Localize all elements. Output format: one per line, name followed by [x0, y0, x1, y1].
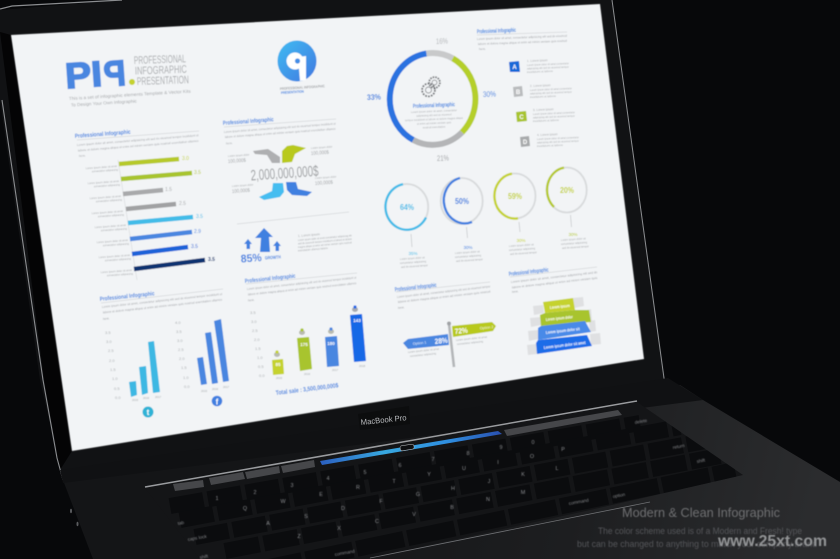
- donut labels: [367, 37, 496, 163]
- heading: Professional Infographic: [100, 291, 155, 303]
- sign: 28%: consectetur adipisicing: [410, 351, 437, 358]
- keyboard legends: delete: [634, 418, 648, 425]
- keyboard legends: 3: [290, 483, 294, 489]
- bar labels: consectetur adipisicing: [98, 212, 125, 218]
- keyboard legends: L: [556, 466, 558, 472]
- bar labels: consectetur adipisicing: [105, 256, 132, 262]
- item text: incididunt ut labore: [537, 143, 564, 148]
- facebook chart: [175, 319, 230, 393]
- axis labels: [250, 310, 265, 378]
- logo: PIP: [64, 52, 135, 96]
- body text: Lorem ipsum dolor sit amet, consectetur adipisicing elit sed do eiusmod: [477, 34, 567, 41]
- twitter chart: 0.5: [114, 386, 120, 391]
- item text: adipisicing elit sed do eiusmod tempor: [527, 65, 569, 70]
- body text: labore et dolore magna aliqua ut enim ad minim veniam quis nostrud: [398, 289, 491, 304]
- twitter chart: 1.0: [112, 376, 118, 381]
- keyboard legends: H: [451, 486, 455, 492]
- body text: Lorem ipsum dolor sit amet, consectetur adipisicing elit sed do eiusmod tempor incididunt ut: [77, 133, 199, 147]
- keyboard legends: D: [341, 506, 345, 512]
- body text: Lorem ipsum dolor sit amet, consectetur adipisicing elit sed do: [511, 270, 598, 284]
- donut labels: 33%: [367, 93, 381, 102]
- value labels: 100,000$: [228, 158, 246, 165]
- logo wordmark: INFOGRAPHIC: [135, 64, 187, 77]
- step layers: [536, 298, 592, 354]
- bar values: [165, 156, 215, 263]
- sign: 72%: Lorem ipsum dolor sit amet: [456, 335, 487, 342]
- keyboard legends: [177, 418, 706, 559]
- panel: stacked steps: [509, 267, 601, 355]
- gauge: 59%: [494, 174, 537, 256]
- gauge: 59%: 30%: [516, 238, 526, 243]
- logo wordmark: [134, 53, 189, 88]
- gauge: 64%: sed do eiusmod tempor: [401, 263, 428, 269]
- keyboard legends: P: [561, 447, 565, 453]
- growth text: magna aliqua ut enim ad minim veniam quis nostrud: [298, 240, 352, 249]
- caption body: The color scheme used is of a Modern and Fresh! type: [598, 526, 802, 537]
- bar values: 3.5: [191, 244, 198, 250]
- year labels: [276, 364, 366, 380]
- value labels: 100,000$: [311, 150, 329, 157]
- facebook chart: 1.0: [183, 375, 189, 380]
- body text: here.: [248, 298, 255, 302]
- center logo caption: [280, 84, 325, 95]
- sign: 72%: 72%: [454, 326, 468, 336]
- body text: [77, 133, 199, 158]
- donut center text: Lorem ipsum dolor sit amet, consectetur: [411, 108, 457, 114]
- bar labels: Lorem ipsum dolor sit amet: [95, 223, 126, 229]
- keyboard legends: W: [280, 499, 286, 505]
- bar values: 3.5: [196, 214, 203, 220]
- body text: labore et dolore magna aliqua ut enim ad minim veniam quis nostrud exercitation ullamco: [103, 298, 223, 314]
- bar labels: Lorem ipsum dolor sit amet: [101, 268, 132, 274]
- growth text: exercitation ullamco laboris: [298, 246, 329, 252]
- donut center text: tempor incididunt ut labore et dolore magna aliqua: [405, 116, 463, 122]
- growth text: 1. Lorem ipsum: [298, 232, 320, 238]
- item text: Lorem ipsum dolor sit amet consectetur: [537, 135, 579, 141]
- gauge: 64%: 35%: [408, 251, 418, 256]
- heading: Professional Infographic: [395, 283, 437, 293]
- growth callout: GROWTH: [265, 254, 282, 260]
- item text: incididunt ut labore: [530, 94, 557, 99]
- body text: [224, 122, 336, 145]
- facebook chart: 0.0: [184, 384, 190, 389]
- bar labels: consectetur adipisicing: [92, 167, 119, 173]
- growth callout: [240, 228, 352, 265]
- donut center text: [405, 108, 463, 129]
- trackpad edge: [370, 502, 650, 558]
- axis labels: 0.0: [259, 373, 265, 378]
- caption body: but can be changed to anything to match your company brand: [577, 539, 817, 550]
- bar icons: [274, 305, 358, 357]
- axis labels: 3.0: [251, 319, 257, 324]
- twitter chart: 2017: [155, 395, 162, 399]
- caption body: [577, 526, 817, 550]
- arrow shapes: [253, 145, 312, 200]
- body text: [102, 292, 223, 321]
- item text: 3. Lorem ipsum: [533, 107, 554, 112]
- growth text: sed do eiusmod tempor incididunt ut labore et dolore: [298, 237, 352, 245]
- keyboard legends: caps lock: [187, 534, 208, 542]
- bars: [272, 314, 366, 375]
- item text: Lorem ipsum dolor sit amet consectetur: [527, 61, 569, 67]
- bar values: 3.0: [182, 156, 189, 162]
- keyboard legends: return: [672, 443, 685, 450]
- body text: Lorem ipsum dolor sit amet, consectetur adipisicing elit sed do eiusmod tempor: [397, 284, 491, 299]
- bar values: 1.5: [165, 187, 172, 193]
- keyboard legends: V: [412, 512, 416, 518]
- panel: 2,000,000,000$ arrows: Lorem ipsum dolor: [311, 144, 333, 150]
- caption heading: Modern & Clean Infographic: [622, 505, 780, 520]
- bar values: 143: [353, 318, 361, 323]
- step labels: Lorem ipsum: [550, 303, 570, 310]
- panel: horizontal bars: [75, 130, 215, 280]
- gauge: 50%: consectetur adipisicing: [455, 253, 482, 259]
- keyboard legends: 1: [216, 496, 218, 502]
- axis labels: 2.5: [252, 328, 258, 333]
- bar labels: consectetur adipisicing: [94, 182, 121, 188]
- twitter chart: 3.0: [106, 339, 112, 344]
- hinge shadow band: [60, 378, 703, 483]
- heading: Professional Infographic: [223, 117, 274, 127]
- laptop base: [63, 385, 840, 559]
- twitter chart: 1.5: [110, 367, 116, 372]
- keyboard legends: U: [462, 466, 466, 472]
- keyboard legends: J: [488, 479, 491, 485]
- tagline: To Design Your Own Infographic: [71, 98, 138, 107]
- donut ring: [390, 53, 475, 145]
- item text: incididunt ut labore: [527, 69, 554, 74]
- growth text: [298, 232, 352, 252]
- keyboard well: [145, 402, 743, 559]
- icon: gears: [422, 77, 440, 96]
- bar values: 3.5: [194, 170, 201, 176]
- keyboard legends: option: [612, 492, 626, 499]
- donut labels: 21%: [437, 154, 449, 163]
- gauge: 20%: 20%: [560, 186, 574, 195]
- keyboard legends: tab: [177, 520, 185, 526]
- twitter chart: 2.0: [109, 358, 115, 363]
- sign: 72%: [452, 322, 496, 346]
- center logo badge: [278, 40, 316, 82]
- facebook chart: 2.0: [179, 356, 185, 361]
- bar values: [275, 318, 361, 367]
- side tabs: [527, 297, 601, 355]
- item badges: [509, 61, 530, 147]
- year labels: 2017: [332, 368, 339, 372]
- logo: PIP: P: [102, 52, 127, 95]
- item text: adipisicing elit sed do eiusmod tempor: [537, 139, 579, 144]
- center logo caption: PRESENTATION: [281, 90, 304, 95]
- laptop lid: [0, 0, 668, 480]
- step labels: Lorem ipsum dolor sit amet: [544, 340, 586, 350]
- keyboard legends: 9: [500, 445, 502, 451]
- badge letters: [512, 65, 528, 146]
- donut center text: adipisicing elit sed do eiusmod: [416, 112, 452, 118]
- sign: 28%: 28%: [434, 336, 448, 346]
- body text: Lorem ipsum dolor sit amet, consectetur adipisicing elit sed do eiusmod tempor incididunt ut: [247, 276, 357, 291]
- gauge: 64%: [385, 184, 428, 269]
- logo wordmark: PRESENTATION: [137, 74, 189, 88]
- heading: Professional Infographic: [509, 267, 549, 278]
- keyboard legends: command: [334, 548, 355, 557]
- year labels: 2015: [276, 376, 283, 380]
- panel: sales chart: [245, 273, 366, 397]
- gauge: 50%: [441, 178, 483, 263]
- badge letters: A: [512, 65, 517, 71]
- gauge: 59%: consectetur adipisicing: [509, 246, 536, 252]
- body text: labore et dolore magna aliqua ut enim ad minim veniam quis: [512, 276, 598, 289]
- bar labels: [86, 164, 134, 277]
- gauge: 20%: consectetur adipisicing: [561, 240, 588, 246]
- twitter chart: 0.0: [115, 395, 121, 400]
- keyboard legends: 8: [466, 451, 470, 457]
- bar labels: Lorem ipsum dolor sit amet: [97, 238, 128, 244]
- heading: Professional Infographic: [245, 274, 296, 285]
- bar labels: consectetur adipisicing: [96, 197, 123, 203]
- item text: adipisicing elit sed do eiusmod tempor: [530, 90, 572, 95]
- body text: here.: [103, 316, 110, 321]
- body text: labore et dolore magna aliqua ut enim ad minim veniam quis nostrud exercitation ullamco: [225, 127, 336, 139]
- body text: here.: [79, 153, 86, 158]
- axis labels: 1.0: [257, 355, 263, 360]
- center logo caption: PROFESSIONAL INFOGRAPHIC: [280, 84, 325, 91]
- step labels: Lorem ipsum dolor: [546, 314, 573, 322]
- MacBook Pro label: MacBook Pro: [360, 413, 407, 427]
- body text: here.: [226, 141, 233, 145]
- gauge: 50%: Lorem ipsum dolor sit: [455, 249, 480, 255]
- sign: 28%: [403, 334, 449, 358]
- facebook chart: 3.0: [177, 338, 183, 343]
- keyboard legends: G: [416, 492, 420, 498]
- heading: Professional Infographic: [75, 130, 131, 140]
- body text: here.: [479, 47, 486, 51]
- logo wordmark: PROFESSIONAL: [134, 53, 186, 67]
- gauge: 64%: consectetur adipisicing: [400, 259, 427, 265]
- item text: Lorem ipsum dolor sit amet consectetur: [533, 110, 575, 116]
- item text: [527, 58, 579, 148]
- tagline: [69, 89, 192, 107]
- gauge: 59%: Lorem ipsum dolor sit: [509, 242, 534, 248]
- donut chart: [367, 37, 496, 163]
- donut center text: ut enim ad minim veniam quis: [417, 120, 452, 126]
- keyboard legends: 6: [398, 463, 402, 469]
- icon: twitter: t: [147, 408, 150, 417]
- bar values: 3.5: [208, 257, 215, 263]
- twitter chart: [105, 330, 162, 402]
- facebook chart: 2.5: [178, 347, 184, 352]
- bar labels: Lorem ipsum dolor sit amet: [86, 164, 117, 170]
- growth text: Lorem ipsum dolor sit amet consectetur adipisicing elit: [298, 233, 352, 242]
- growth callout: 85%: [240, 252, 262, 265]
- keyboard legends: O: [530, 454, 534, 460]
- keyboard legends: Y: [427, 472, 431, 478]
- keyboard legends: F: [379, 499, 383, 505]
- item text: 2. Lorem ipsum: [530, 83, 551, 88]
- side ports: [70, 509, 78, 526]
- body text: here.: [512, 289, 519, 294]
- gauge: 64%: Lorem ipsum dolor sit: [400, 255, 425, 261]
- body text: Lorem ipsum dolor sit amet, consectetur adipisicing elit sed do eiusmod tempor incididunt ut: [224, 122, 336, 134]
- value labels: 100,000$: [315, 180, 333, 187]
- body text: [477, 34, 567, 51]
- badge letters: B: [516, 90, 521, 96]
- total sale: Total sale : 3,500,000,000$: [275, 382, 339, 397]
- badge letters: D: [523, 140, 528, 146]
- axis labels: 2.0: [254, 337, 260, 342]
- year labels: 2018: [359, 364, 366, 368]
- item text: Lorem ipsum dolor sit amet consectetur: [530, 86, 572, 92]
- gauge: 20%: Lorem ipsum dolor sit: [561, 236, 586, 242]
- facebook chart: 2017: [223, 385, 230, 389]
- axis labels: 0.5: [258, 364, 264, 369]
- keyboard legends: R: [356, 485, 360, 491]
- twitter chart: 2015: [132, 398, 139, 402]
- sign: 28%: Lorem ipsum dolor sit amet: [408, 347, 439, 354]
- donut labels: 16%: [436, 37, 448, 46]
- bar labels: Lorem ipsum dolor sit amet: [88, 179, 119, 185]
- item text: incididunt ut labore: [533, 118, 560, 123]
- gauge: 20%: sed do eiusmod tempor: [562, 244, 589, 250]
- bar values: 85: [275, 362, 281, 367]
- sign: 28%: Option 1: [413, 341, 427, 346]
- keyboard legends: 5: [364, 470, 366, 476]
- item text: 4. Lorem ipsum: [537, 132, 558, 137]
- keyboard legends: K: [521, 472, 525, 478]
- tagline: This is a set of infographic elements Template & Vector Kits: [69, 89, 192, 101]
- bar labels: consectetur adipisicing: [103, 241, 130, 247]
- keyboard legends: A: [266, 521, 270, 527]
- total value: 2,000,000,000$: [250, 163, 320, 184]
- bar labels: Lorem ipsum dolor sit amet: [90, 194, 121, 200]
- body text: here.: [398, 305, 405, 310]
- MacBook Pro label: [358, 406, 410, 430]
- panel: signpost: [395, 282, 496, 367]
- twitter chart: 3.5: [105, 330, 111, 335]
- keyboard legends: M: [521, 490, 526, 496]
- gauge: 20%: 30%: [568, 232, 578, 237]
- bar values: 2.9: [194, 229, 201, 235]
- facebook chart: 3.5: [176, 329, 182, 334]
- donut center text: nostrud exercitation: [423, 124, 446, 129]
- icon: facebook: f: [216, 398, 219, 406]
- bar values: 175: [300, 342, 308, 347]
- facebook chart: 2016: [212, 387, 219, 391]
- keyboard legends: 7: [432, 457, 434, 463]
- keyboard legends: E: [319, 492, 323, 498]
- bar labels: consectetur adipisicing: [101, 226, 128, 232]
- bar labels: Lorem ipsum dolor sit amet: [92, 209, 123, 215]
- body text: [247, 276, 357, 302]
- item text: 1. Lorem ipsum: [527, 58, 548, 63]
- keyboard legends: Q: [243, 506, 247, 512]
- bar values: 180: [327, 341, 335, 346]
- keyboard legends: 2: [254, 490, 256, 496]
- sign: 72%: consectetur adipisicing: [457, 339, 484, 346]
- axis labels: 3.5: [250, 310, 256, 315]
- panel: 2,000,000,000$ arrows: Lorem ipsum dolor: [228, 152, 250, 158]
- panel: A B C D list: [477, 28, 579, 148]
- gauge: 59%: 59%: [508, 192, 522, 201]
- laptop screen: [11, 4, 644, 451]
- step labels: [544, 303, 586, 350]
- watermark: www.25xt.com: [717, 533, 827, 550]
- gauge: 50%: 30%: [463, 245, 473, 250]
- year labels: 2016: [304, 372, 311, 376]
- sign pole: [447, 322, 454, 367]
- touch bar: [145, 401, 637, 491]
- twitter chart: 2016: [143, 396, 150, 400]
- body text: Lorem ipsum dolor sit amet, consectetur adipisicing elit sed do eiusmod tempor incididunt ut: [102, 292, 223, 309]
- keyboard legends: shift: [696, 457, 706, 464]
- facebook chart: 4.0: [175, 320, 181, 325]
- item text: adipisicing elit sed do eiusmod tempor: [533, 114, 575, 119]
- gauge: 50%: sed do eiusmod tempor: [456, 257, 483, 263]
- keyboard legends: I: [497, 460, 499, 466]
- keyboard legends: X: [337, 526, 341, 532]
- panel: 2,000,000,000$ arrows: [223, 117, 349, 224]
- bar values: 2.5: [179, 201, 186, 207]
- keyboard legends: 4: [326, 476, 330, 482]
- keyboard legends: B: [450, 505, 454, 511]
- keyboard legends: 0: [532, 440, 534, 446]
- body text: labore et dolore magna aliqua ut enim ad minim veniam quis nostrud exercitation ullamco: [248, 281, 357, 296]
- gauge: 50%: 50%: [455, 197, 469, 206]
- gauge: 59%: sed do eiusmod tempor: [510, 250, 537, 256]
- logo: PIP: PI: [64, 53, 103, 96]
- keyboard legends: S: [304, 514, 308, 520]
- body text: [397, 284, 491, 310]
- panel: social bar charts: [100, 289, 230, 418]
- heading: Professional Infographic: [477, 28, 516, 35]
- body text: labore et dolore magna aliqua ut enim ad minim veniam quis nostrud exercitation ullamco: [78, 139, 199, 152]
- icon: growth arrows: [244, 228, 281, 252]
- donut center title: Professional Infographic: [413, 102, 455, 110]
- facebook chart: 2015: [201, 389, 208, 393]
- value labels: [228, 150, 333, 195]
- bars: [119, 159, 205, 269]
- keyboard legends: Z: [297, 534, 301, 540]
- keyboard legends: C: [375, 519, 379, 525]
- value labels: 100,000$: [232, 188, 250, 195]
- keyboard legends: N: [486, 497, 490, 503]
- facebook chart: 1.5: [181, 365, 187, 370]
- gauge: 20%: [547, 168, 589, 250]
- panel: 2,000,000,000$ arrows: Lorem ipsum dolor: [315, 174, 337, 180]
- donut labels: 30%: [483, 90, 496, 99]
- body text: labore et dolore magna aliqua ut enim ad minim veniam quis nostrud: [478, 39, 567, 46]
- body text: [511, 270, 598, 294]
- badge letters: C: [519, 115, 524, 121]
- axis labels: 1.5: [255, 346, 261, 351]
- bar labels: consectetur adipisicing: [107, 271, 134, 277]
- sign: 72%: Option 2: [480, 325, 494, 330]
- keyboard legends: T: [392, 479, 396, 485]
- bar labels: Lorem ipsum dolor sit amet: [99, 253, 130, 259]
- twitter chart: 2.5: [108, 348, 114, 353]
- step labels: Lorem ipsum dolor sit: [546, 326, 580, 335]
- panel: 2,000,000,000$ arrows: Lorem ipsum dolor: [232, 182, 254, 188]
- keyboard legends: command: [568, 497, 589, 506]
- gauge: 64%: 64%: [400, 203, 414, 212]
